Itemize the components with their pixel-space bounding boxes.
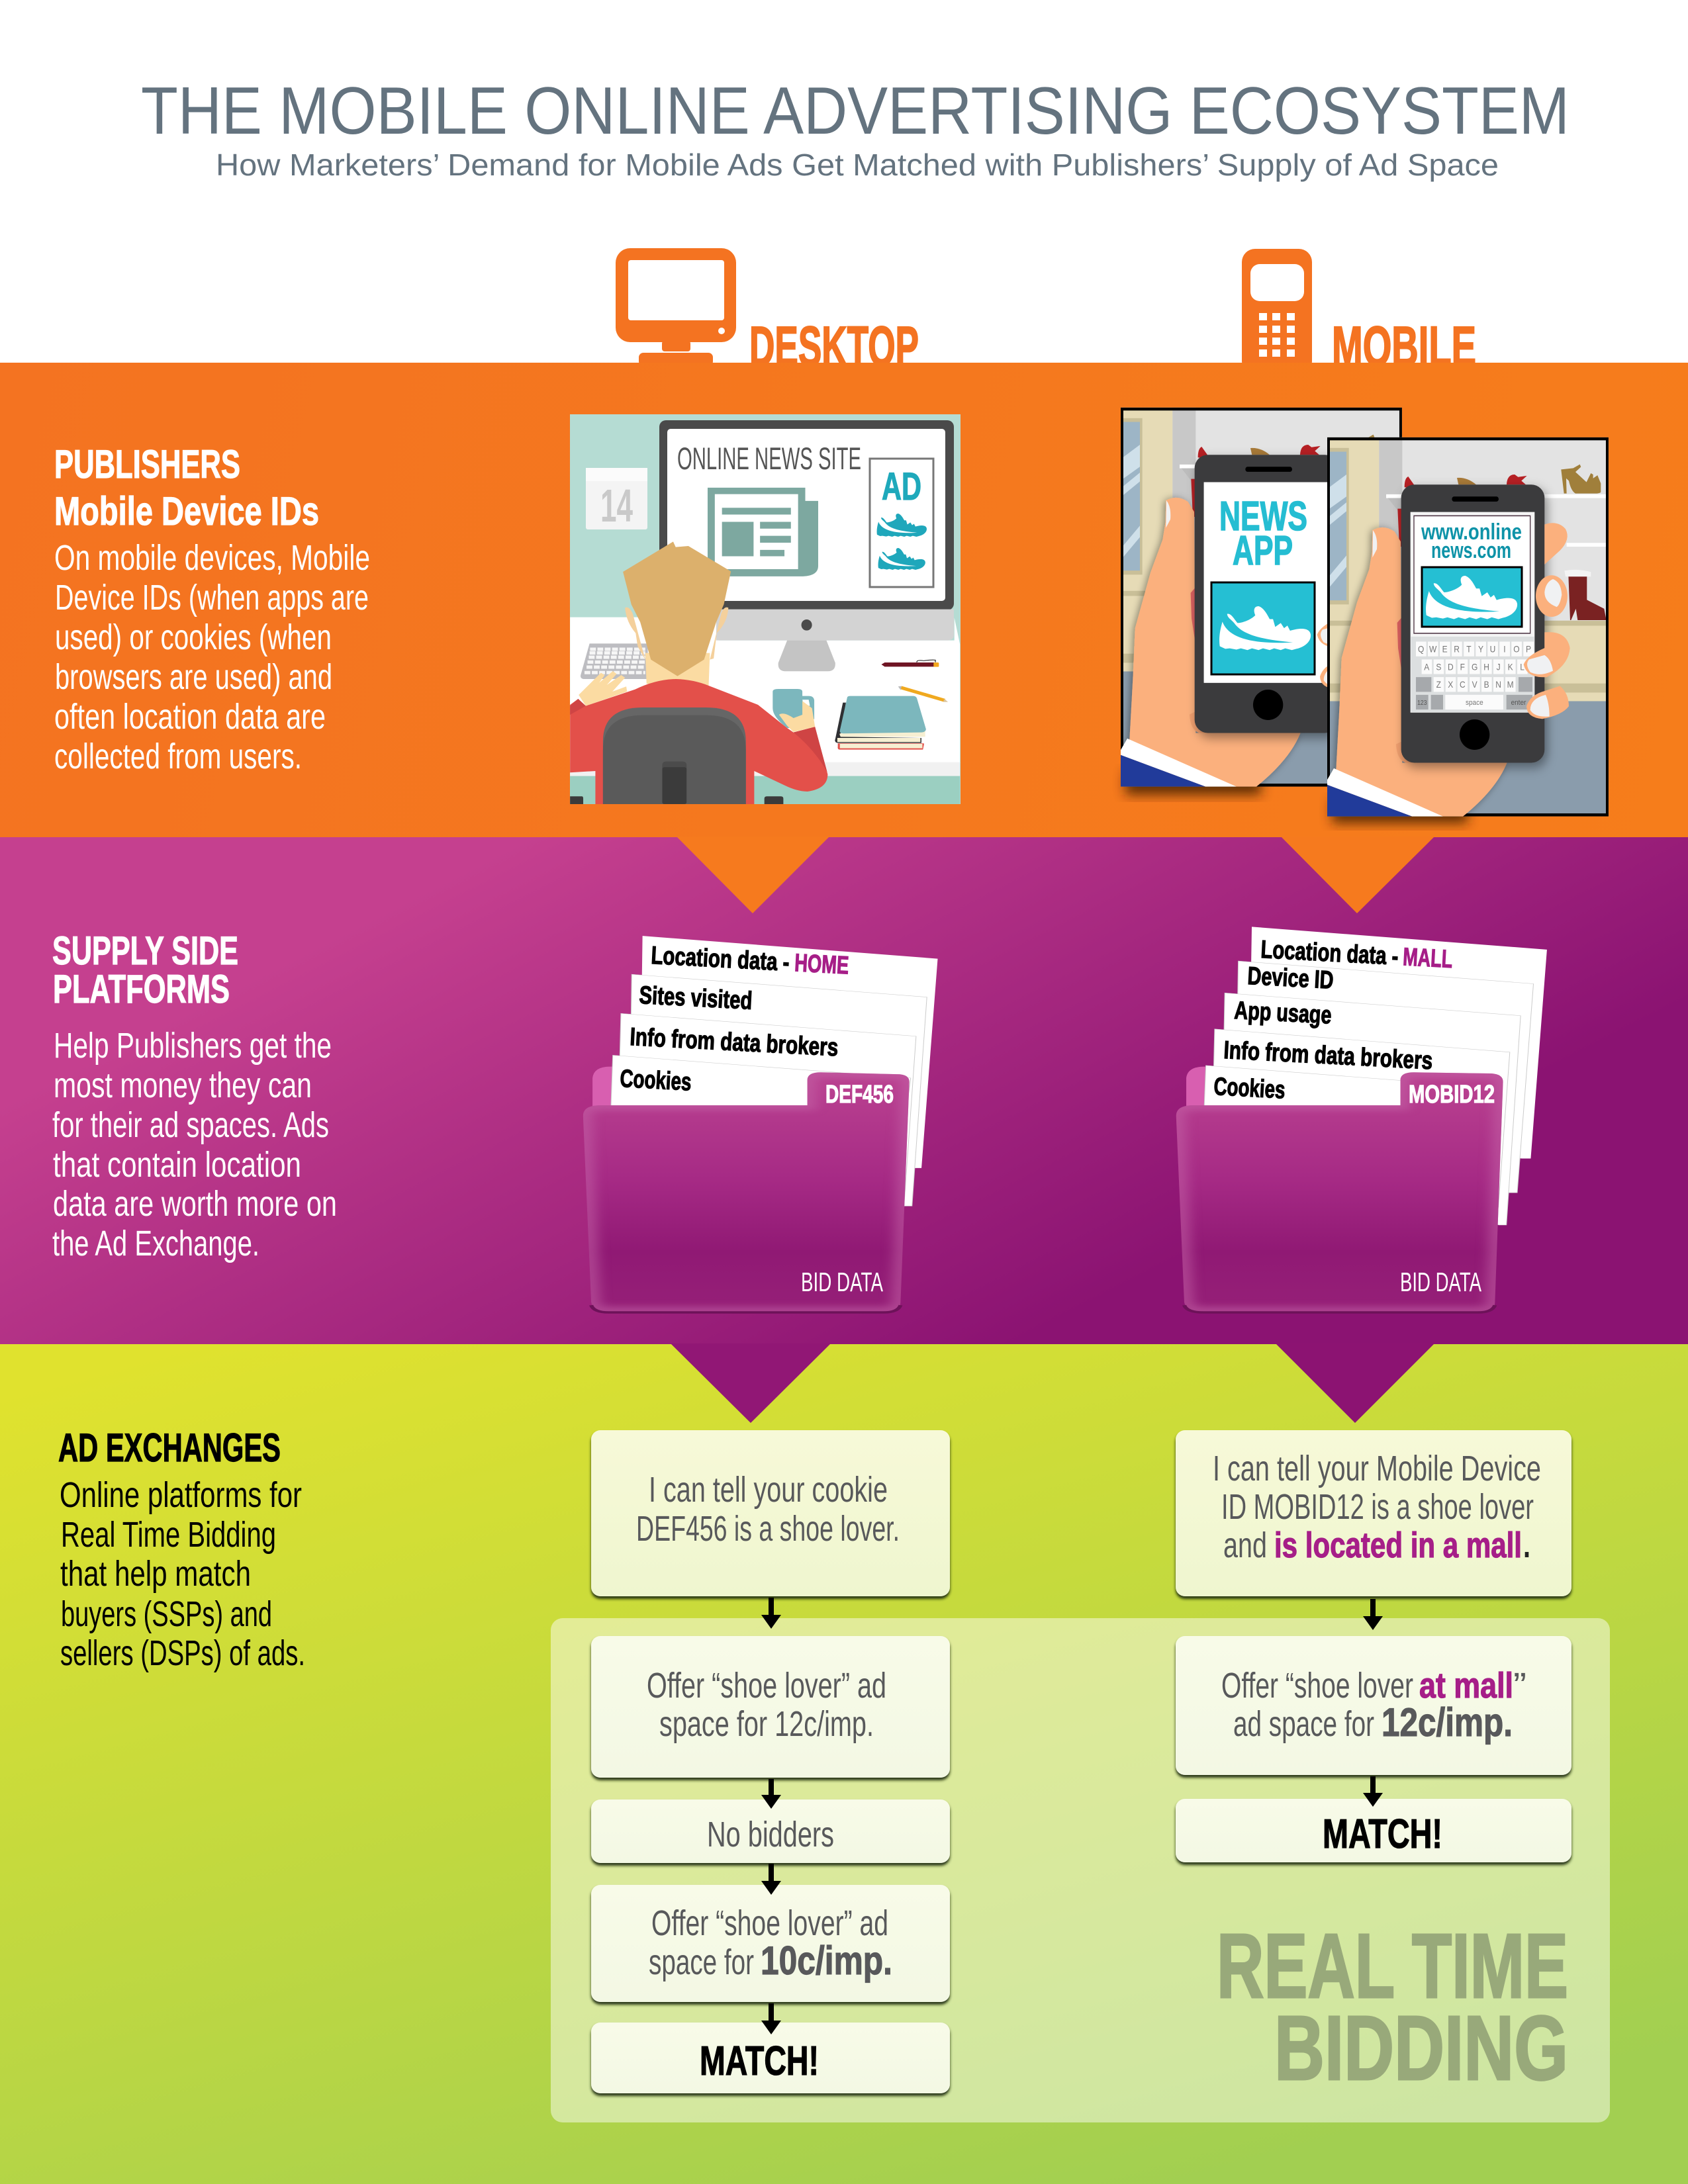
box: mobile device id shoe lover <box>1176 1430 1571 1596</box>
box: offer 10c: Offer “shoe lover” ad <box>651 1903 888 1943</box>
box: cookie shoe lover: DEF456 is a shoe lover. <box>636 1509 900 1549</box>
text block: publishers: PUBLISHERS <box>54 442 240 486</box>
box: offer 12c left: space for 12c/imp. <box>659 1704 874 1744</box>
store scene, hand and keyboard: space <box>1466 699 1483 707</box>
box: offer 12c left: Offer “shoe lover” ad <box>647 1666 886 1706</box>
paper labels: App usage <box>1234 997 1333 1030</box>
band: orange publishers background <box>0 363 1688 837</box>
tab label: DEF456 <box>825 1081 894 1109</box>
arrow: supply side to mobile exchange <box>1276 1343 1434 1423</box>
arrow: left step 2 <box>761 1779 781 1809</box>
arrow: right step 1 <box>1363 1599 1383 1630</box>
arrow: publishers to desktop folder <box>677 837 829 913</box>
store scene, hand and keyboard: enter <box>1511 699 1526 707</box>
text block: publishers: Device IDs (when apps are <box>55 578 369 617</box>
text block: supply side platforms: SUPPLY SIDE <box>52 929 238 973</box>
text block: ad exchanges: Online platforms for <box>60 1475 302 1515</box>
text: ad: AD <box>882 465 921 508</box>
box: no bidders <box>591 1799 950 1863</box>
text block: publishers: browsers are used) and <box>55 657 332 697</box>
monitor screen <box>667 429 945 601</box>
box: mobile device id shoe lover: is located in a mall <box>1274 1525 1522 1565</box>
box: match left: MATCH! <box>700 2038 819 2084</box>
text block: publishers: On mobile devices, Mobile <box>54 538 370 578</box>
calendar: 14 <box>600 480 633 531</box>
text block: ad exchanges: Real Time Bidding <box>61 1515 276 1555</box>
label: real time bidding: BIDDING <box>1274 1997 1568 2099</box>
tab label: MOBID12 <box>1409 1081 1495 1109</box>
paper labels: Cookies <box>620 1065 692 1097</box>
arrow: left step 1 <box>761 1598 781 1629</box>
icon: ad shoe top <box>877 514 927 537</box>
text block: publishers: collected from users. <box>54 737 302 776</box>
desk, person and objects <box>570 541 960 804</box>
paper labels: Location data - <box>651 942 790 977</box>
store scene, hand and keyboard: ASDFGHJKL <box>1424 662 1524 672</box>
text block: supply side platforms: that contain location <box>53 1145 301 1185</box>
shadow under panel <box>1332 799 1468 823</box>
subtitle: How Marketers’ Demand for Mobile Ads Get Matched with Publishers’ Supply of Ad Space <box>216 148 1499 182</box>
label: real time bidding <box>1217 1915 1568 2099</box>
paper labels <box>1213 936 1453 1105</box>
ad image: teal shoe tile <box>1211 582 1315 674</box>
arrow: left step 4 <box>761 2003 781 2034</box>
illustration: person at desktop computer <box>570 414 961 804</box>
box: match left <box>591 2023 950 2093</box>
text block: supply side platforms: PLATFORMS <box>53 967 230 1011</box>
box: offer 10c: 10c/imp. <box>761 1938 892 1983</box>
box: offer 10c: space for <box>649 1942 754 1982</box>
folder front <box>1176 1072 1503 1312</box>
band: yellow ad exchanges background <box>0 1344 1688 2184</box>
text: online news site: ONLINE NEWS SITE <box>677 441 861 476</box>
box: cookie shoe lover <box>591 1430 950 1596</box>
text: www.online news.com: www.online <box>1421 520 1522 545</box>
box: mobile device id shoe lover: . <box>1523 1525 1530 1565</box>
text: news app: APP <box>1233 528 1293 574</box>
box: offer at mall right: ad space for <box>1233 1704 1374 1744</box>
box: offer at mall right: 12c/imp. <box>1382 1700 1513 1745</box>
box: mobile device id shoe lover: and <box>1223 1525 1267 1565</box>
paper labels: Location data - <box>1260 936 1399 971</box>
text block: publishers: used) or cookies (when <box>55 617 332 657</box>
paper labels: Info from data brokers <box>630 1023 839 1062</box>
store scene, hand and keyboard: QWERTYUIOP <box>1418 644 1531 655</box>
store scene, hand and keyboard: 123 <box>1417 700 1427 706</box>
paper labels: Cookies <box>1213 1073 1286 1105</box>
store scene and hand <box>1121 408 1402 787</box>
box: offer at mall right: ” <box>1513 1666 1526 1706</box>
illustration: news app phone panel <box>1121 408 1402 795</box>
text block: supply side platforms: for their ad spaces. Ads <box>52 1105 329 1145</box>
box: offer at mall right: Offer “shoe lover <box>1221 1666 1413 1706</box>
box: cookie shoe lover: I can tell your cookie <box>649 1470 888 1510</box>
arrow: left step 3 <box>761 1864 781 1895</box>
wall <box>570 414 961 804</box>
band: purple supply side platforms background <box>0 837 1688 1344</box>
folder: mobile bid data <box>1176 927 1547 1312</box>
text block: supply side platforms: the Ad Exchange. <box>52 1224 259 1263</box>
text: www.online news.com <box>1421 520 1522 563</box>
text block: ad exchanges: buyers (SSPs) and <box>61 1594 272 1634</box>
box: offer 10c <box>591 1885 950 2002</box>
text block: supply side platforms: data are worth more on <box>53 1184 337 1224</box>
panel: real time bidding <box>551 1618 1610 2122</box>
text block: supply side platforms: Help Publishers get the <box>54 1026 332 1066</box>
folder front <box>583 1072 910 1312</box>
text block: publishers: often location data are <box>54 697 326 737</box>
text block: ad exchanges: sellers (DSPs) of ads. <box>60 1633 305 1673</box>
box: no bidders: No bidders <box>707 1815 834 1854</box>
text block: publishers <box>54 442 370 776</box>
heading: desktop: DESKTOP <box>749 315 919 377</box>
arrow: right step 2 <box>1363 1776 1383 1807</box>
text block: supply side platforms: most money they can <box>54 1066 312 1105</box>
text: www.online news.com: news.com <box>1431 538 1511 563</box>
box: offer at mall right: at mall <box>1419 1666 1513 1706</box>
icon: ad shoe bottom <box>878 548 925 570</box>
folder back tab and papers <box>592 936 938 1207</box>
store scene, hand and keyboard: ZXCVBNM <box>1436 679 1514 690</box>
monitor bezel <box>659 420 954 610</box>
shadow under panel <box>1125 771 1261 795</box>
folder back tab and papers <box>1186 927 1547 1225</box>
ad image: teal shoe tile <box>1422 567 1522 627</box>
paper labels: Sites visited <box>639 981 753 1015</box>
paper labels: Info from data brokers <box>1223 1036 1433 1075</box>
paper labels: Device ID <box>1247 962 1335 995</box>
icon: newspaper <box>708 488 818 576</box>
paper labels: HOME <box>794 949 849 980</box>
text block: ad exchanges <box>58 1426 305 1673</box>
heading: mobile: MOBILE <box>1332 315 1476 377</box>
box: offer at mall right <box>1176 1636 1571 1775</box>
text block: ad exchanges: AD EXCHANGES <box>58 1426 281 1470</box>
ad box <box>870 459 933 587</box>
box: match right: MATCH! <box>1323 1811 1442 1857</box>
store scene, hand and keyboard <box>1327 437 1609 817</box>
text: news app: NEWS <box>1219 494 1307 539</box>
arrow: publishers to mobile folder <box>1281 837 1434 913</box>
text block: publishers: Mobile Device IDs <box>54 489 319 533</box>
box: match right <box>1176 1799 1571 1862</box>
paper labels: MALL <box>1402 943 1453 974</box>
folder label: BID DATA <box>801 1267 883 1297</box>
box: offer 12c left <box>591 1636 950 1778</box>
box: mobile device id shoe lover: I can tell your Mobile Device <box>1213 1449 1541 1488</box>
calendar <box>586 468 647 531</box>
text block: ad exchanges: that help match <box>60 1554 251 1594</box>
arrow: supply side to desktop exchange <box>671 1343 831 1423</box>
box: mobile device id shoe lover: ID MOBID12 is a shoe lover <box>1221 1487 1534 1527</box>
folder label: BID DATA <box>1400 1267 1481 1297</box>
title: THE MOBILE ONLINE ADVERTISING ECOSYSTEM <box>141 74 1570 148</box>
paper labels <box>620 942 849 1097</box>
illustration: mobile browser phone panel <box>1327 437 1609 823</box>
text: news app <box>1219 494 1307 574</box>
folder: desktop bid data <box>583 936 938 1312</box>
icon: desktop monitor <box>616 248 736 366</box>
icon: mobile phone <box>1242 249 1312 375</box>
text block: supply side platforms <box>52 929 337 1263</box>
